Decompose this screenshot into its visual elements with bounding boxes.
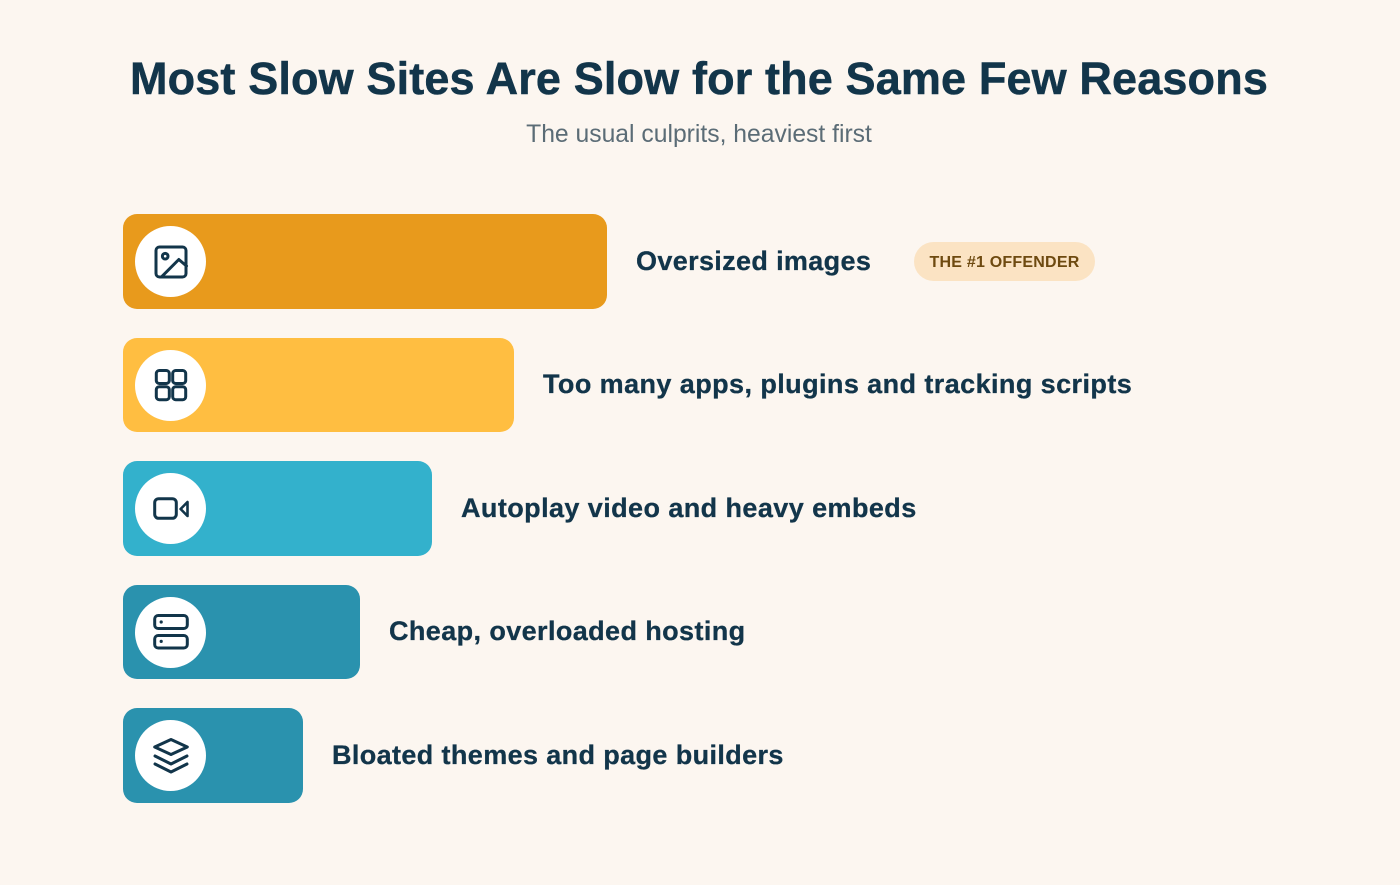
bar: oversized images xyxy=(123,214,607,308)
icon: video camera xyxy=(135,473,206,544)
bar: video and embeds xyxy=(123,461,432,556)
bar: themes and builders xyxy=(123,708,303,802)
label: oversized images: Oversized images xyxy=(636,246,871,276)
bar: apps and scripts xyxy=(123,338,514,432)
row: video and embeds xyxy=(123,461,917,556)
label: apps and scripts: Too many apps, plugins and tracking scripts xyxy=(543,368,1132,398)
badge: the number one offender: THE #1 OFFENDER xyxy=(930,254,1080,271)
subtitle: The usual culprits, heaviest first xyxy=(526,121,872,148)
badge: the number one offender xyxy=(914,242,1095,281)
icon: server xyxy=(135,596,206,668)
row: themes and builders xyxy=(123,708,784,803)
row: hosting xyxy=(123,585,746,679)
label: video and embeds: Autoplay video and heavy embeds xyxy=(461,493,917,523)
icon: app grid xyxy=(135,350,206,420)
label: themes and builders: Bloated themes and page builders xyxy=(332,740,784,770)
row: apps and scripts xyxy=(123,338,1132,432)
title: Most Slow Sites Are Slow for the Same Few Reasons xyxy=(130,53,1268,104)
icon: layers xyxy=(135,720,206,791)
bar: hosting xyxy=(123,584,360,679)
label: hosting: Cheap, overloaded hosting xyxy=(389,616,746,646)
row: oversized images xyxy=(123,214,1095,309)
icon: image xyxy=(135,226,206,297)
